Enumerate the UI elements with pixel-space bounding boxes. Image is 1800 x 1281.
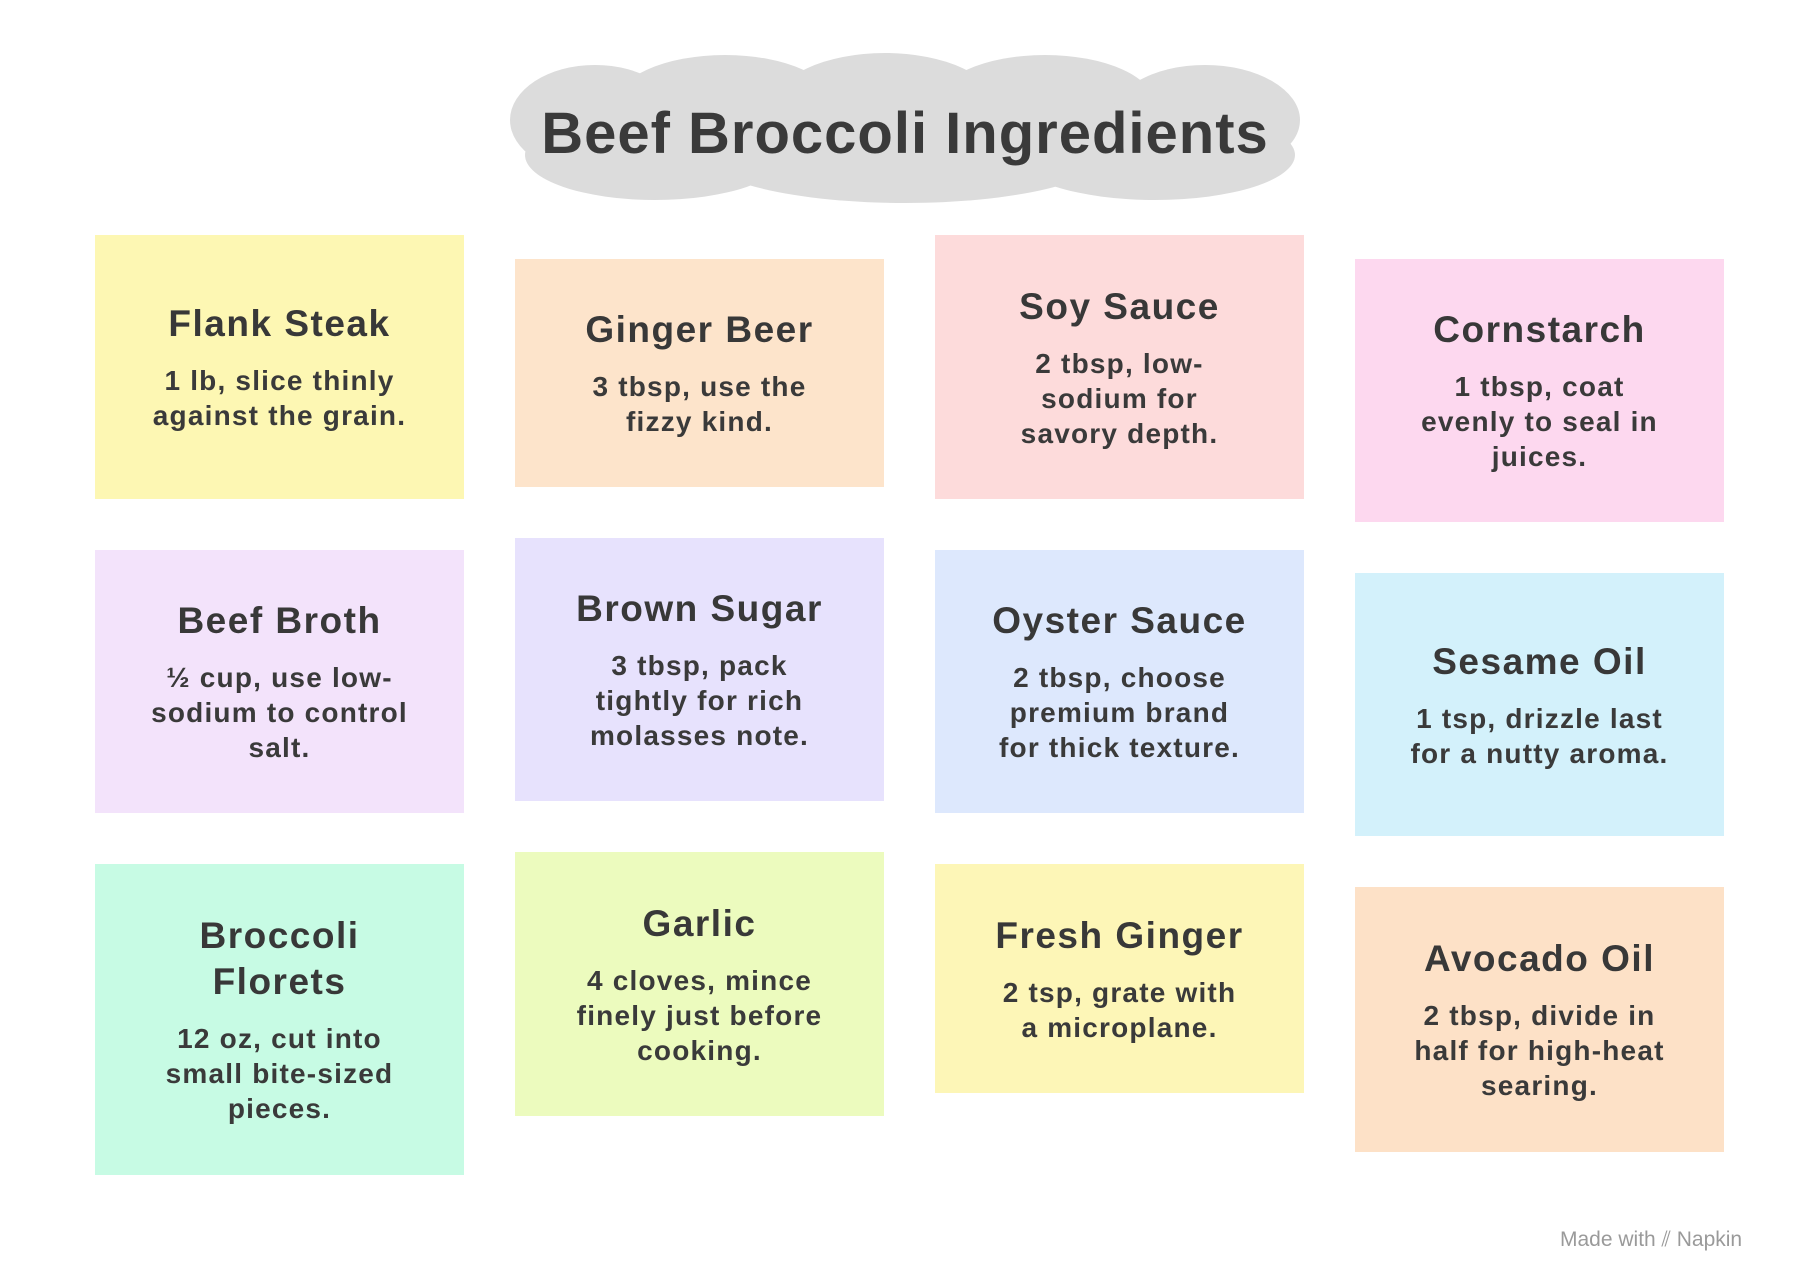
card: Avocado Oil: 2 tbsp, divide in half for high-heat searing.: [1414, 1000, 1665, 1101]
card: Broccoli Florets: Florets: [213, 961, 346, 1002]
card: Fresh Ginger: Fresh Ginger: [995, 914, 1244, 956]
card: Garlic: 4 cloves, mince finely just before cooking.: [577, 964, 822, 1066]
card: Garlic: Garlic: [643, 902, 756, 944]
card: Flank Steak: Flank Steak: [168, 303, 391, 344]
card: Sesame Oil: 1 tsp, drizzle last for a nutty aroma.: [1410, 702, 1669, 768]
card: Cornstarch: Cornstarch: [1433, 309, 1646, 350]
card: Brown Sugar: 3 tbsp, pack tightly for rich molasses note.: [590, 650, 809, 751]
card: Beef Broth: ½ cup, use low-sodium to control salt.: [151, 662, 408, 763]
card: Ginger Beer: Ginger Beer: [585, 309, 814, 350]
card: Soy Sauce: 2 tbsp, low-sodium for savory depth.: [1021, 348, 1218, 448]
card: Fresh Ginger: 2 tsp, grate with a microplane.: [1003, 976, 1236, 1042]
card: Soy Sauce: Soy Sauce: [1019, 286, 1220, 326]
card: Fresh Ginger: [935, 864, 1304, 1093]
card: Beef Broth: [95, 550, 464, 813]
card: Beef Broth: Beef Broth: [177, 600, 382, 641]
card: Cornstarch: [1355, 259, 1724, 522]
card: Oyster Sauce: Oyster Sauce: [992, 600, 1247, 641]
card: Brown Sugar: Brown Sugar: [576, 588, 823, 629]
card: Sesame Oil: Sesame Oil: [1432, 640, 1647, 682]
title: Beef Broccoli Ingredients: [541, 101, 1269, 166]
title cloud: [510, 53, 1300, 203]
card: Brown Sugar: [515, 538, 884, 801]
card: Flank Steak: [95, 235, 464, 499]
card: Cornstarch: 1 tbsp, coat evenly to seal in juices.: [1421, 371, 1658, 472]
card: Ginger Beer: 3 tbsp, use the fizzy kind.: [592, 371, 807, 437]
card: Soy Sauce: [935, 235, 1304, 499]
card: Flank Steak: 1 lb, slice thinly against the grain.: [153, 365, 406, 431]
card: Ginger Beer: [515, 259, 884, 487]
card: Garlic: [515, 852, 884, 1116]
card: Broccoli Florets: Broccoli: [199, 915, 360, 956]
card: Broccoli Florets: 12 oz, cut into small bite-sized pieces.: [166, 1023, 393, 1124]
card: Avocado Oil: Avocado Oil: [1424, 938, 1655, 979]
footer credit: Made with ⫽ Napkin: [1560, 1228, 1742, 1251]
card: Sesame Oil: [1355, 573, 1724, 836]
card: Broccoli Florets: [95, 864, 464, 1175]
card: Avocado Oil: [1355, 887, 1724, 1152]
card: Oyster Sauce: 2 tbsp, choose premium brand for thick texture.: [999, 662, 1240, 763]
card: Oyster Sauce: [935, 550, 1304, 813]
